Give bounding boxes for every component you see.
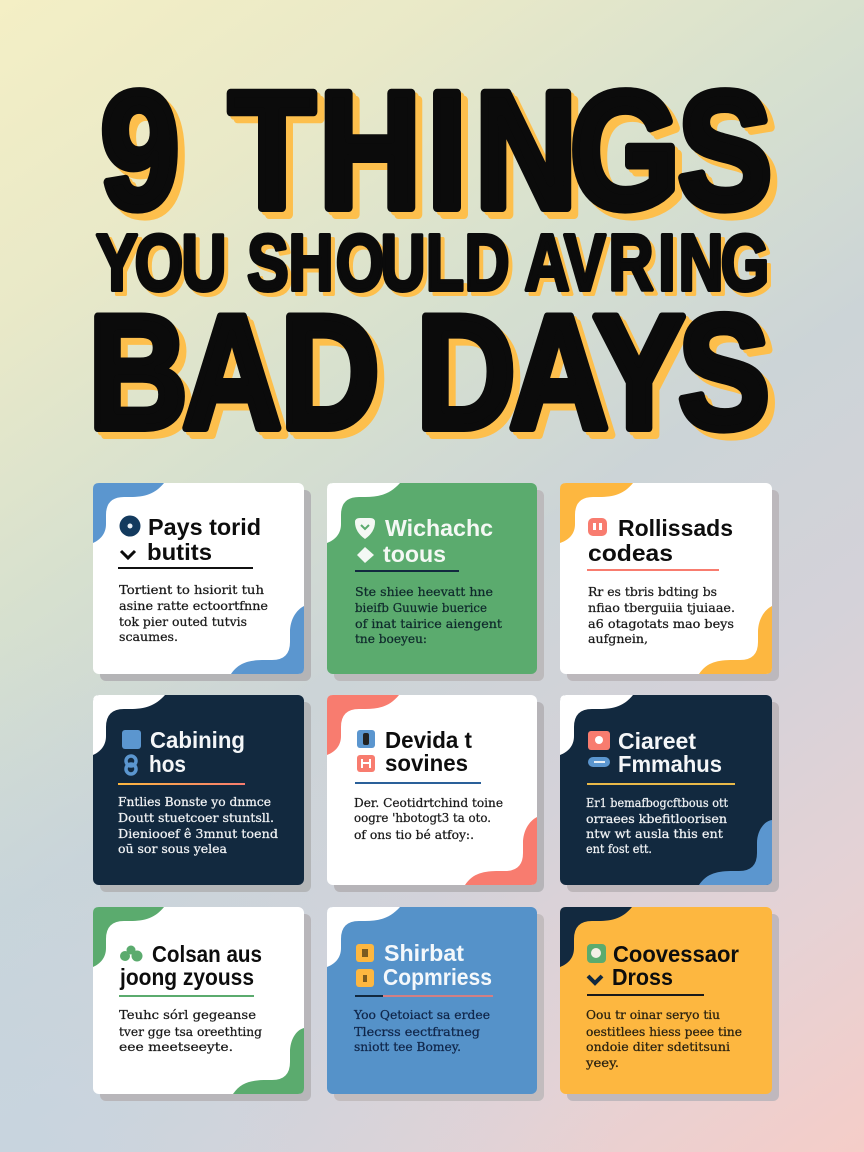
text block: Tortient to hsiorit tuh — [119, 582, 264, 597]
icon: blue badge — [357, 730, 375, 748]
title line: BAD DAYS: BAD DAYS — [95, 288, 777, 469]
heading: sovines — [385, 750, 468, 776]
rule — [118, 783, 245, 785]
text block: a6 otagotats mao beys — [588, 616, 734, 631]
heading: Copmriess — [383, 964, 492, 990]
heading: toous — [383, 541, 446, 567]
icon: blue pill — [588, 757, 610, 767]
heading — [383, 515, 493, 567]
text block: Dieniooef ê 3mnut toend — [118, 826, 278, 841]
text block — [354, 795, 503, 842]
text block: Teuhc sórl gegeanse — [119, 1007, 256, 1022]
heading: Colsan aus — [152, 941, 262, 967]
title line: 9 THINGS: 9 THINGS — [101, 58, 772, 243]
heading — [612, 941, 739, 990]
text block — [355, 584, 502, 646]
title line: BAD DAYS: BAD DAYS — [92, 285, 773, 466]
heading: Coovessaor — [613, 941, 739, 967]
text block: Er1 bemafbogcftbous ott — [586, 795, 728, 810]
text block: oū sor sous yelea — [118, 841, 228, 856]
icon: green badge — [587, 944, 606, 963]
text block: bieifb Guuwie buerice — [355, 600, 487, 615]
panel: card 8 — [327, 907, 544, 1101]
heading: Dross — [612, 964, 673, 990]
heading: Rollissads — [618, 515, 733, 541]
text block — [118, 794, 278, 856]
text block: Fntlies Bonste yo dnmce — [118, 794, 271, 809]
panel: card 2 — [327, 483, 544, 681]
rule — [119, 995, 254, 997]
text block: Rr es tbris bdting bs — [588, 584, 717, 599]
icon: circle badge — [120, 516, 140, 536]
heading: Fmmahus — [618, 751, 722, 777]
heading: Pays torid — [148, 514, 261, 540]
rule — [587, 783, 735, 785]
icon: blue square — [122, 730, 141, 749]
title line: YOU SHOULD AVRING: YOU SHOULD AVRING — [96, 219, 769, 308]
text block: ent fost ett. — [586, 841, 652, 856]
heading: Wichachc — [385, 515, 493, 541]
icon: coral badge — [357, 755, 375, 772]
text block: orraees kbefitloorisen — [586, 811, 727, 826]
rule — [355, 995, 493, 997]
text block: Ste shiee heevatt hne — [355, 584, 493, 599]
text block: Der. Ceotidrtchind toine — [354, 795, 503, 810]
text block: oestitlees hiess peee tine — [586, 1024, 742, 1039]
text block — [119, 1007, 262, 1054]
panel: card 6 — [560, 695, 779, 892]
heading — [149, 727, 245, 777]
icon: chevron — [588, 976, 602, 983]
rule — [587, 569, 719, 571]
text block: Oou tr oinar seryo tiu — [586, 1007, 720, 1022]
heading: Devida t — [385, 727, 472, 753]
heading: Shirbat — [384, 940, 464, 966]
heading — [119, 941, 262, 990]
text block: eee meetseeyte. — [119, 1039, 233, 1054]
heading: codeas — [588, 540, 673, 566]
panel: card 4 — [93, 695, 311, 892]
text block: scaumes. — [119, 629, 178, 644]
heading: joong zyouss — [119, 964, 254, 990]
heading — [383, 940, 492, 990]
text block: yeey. — [585, 1055, 619, 1070]
panel: card 9 — [560, 907, 779, 1101]
icon: shield check — [355, 518, 375, 539]
icon: blue glyph — [126, 756, 136, 774]
text block — [353, 1007, 490, 1054]
panel: card 1 — [93, 483, 311, 681]
text block: sniott tee Bomey. — [354, 1039, 461, 1054]
icon: clover — [120, 946, 142, 962]
text block: ntw wt ausla this ent — [586, 826, 723, 841]
text block: tne boeyeu: — [355, 631, 427, 646]
text block: of ons tio bé atfoy:. — [354, 827, 474, 842]
title — [88, 58, 779, 469]
title line: 9 THINGS: 9 THINGS — [108, 65, 779, 250]
icon: yellow badge — [356, 969, 374, 987]
text block — [588, 584, 735, 646]
text block: nfiao tberguiia tjuiaae. — [588, 600, 735, 615]
text block: tok pier outed tutvis — [119, 614, 247, 629]
text block: ondoie diter sdetitsuni — [586, 1039, 730, 1054]
rule — [355, 782, 481, 784]
text block — [119, 582, 268, 644]
heading — [618, 728, 722, 777]
rule — [118, 567, 253, 569]
icon: diamond — [357, 547, 374, 563]
text block — [585, 1007, 742, 1070]
text block: Tlecrss eectfratneg — [354, 1024, 480, 1039]
rule — [355, 570, 459, 572]
icon: coral badge — [588, 731, 610, 750]
text block: aufgnein, — [588, 631, 648, 646]
title line: 9 THINGS: 9 THINGS — [104, 61, 776, 247]
panel: card 7 — [93, 907, 311, 1101]
text block: asine ratte ectoortfnne — [119, 598, 268, 613]
panel: card 3 — [560, 483, 779, 681]
icon: yellow badge — [356, 944, 374, 962]
heading: butits — [147, 539, 212, 565]
text block: tver gge tsa oreethting — [119, 1024, 262, 1039]
title line: BAD DAYS: BAD DAYS — [88, 281, 770, 462]
heading: hos — [149, 751, 186, 777]
rule — [587, 994, 704, 996]
text block: Doutt stuetcoer stuntsll. — [118, 810, 274, 825]
text block — [586, 795, 728, 856]
icon: coral badge — [588, 518, 607, 536]
heading: Ciareet — [618, 728, 696, 754]
text block: of inat tairice aiengent — [355, 616, 502, 631]
heading — [588, 515, 733, 566]
text block: Yoo Qetoiact sa erdee — [353, 1007, 490, 1022]
icon: chevron — [121, 551, 135, 558]
text block: oogre 'hbotogt3 ta oto. — [354, 810, 491, 825]
heading: Cabining — [150, 727, 245, 753]
heading — [385, 727, 472, 776]
title line: YOU SHOULD AVRING: YOU SHOULD AVRING — [100, 223, 773, 312]
heading — [147, 514, 261, 565]
panel: card 5 — [327, 695, 544, 892]
